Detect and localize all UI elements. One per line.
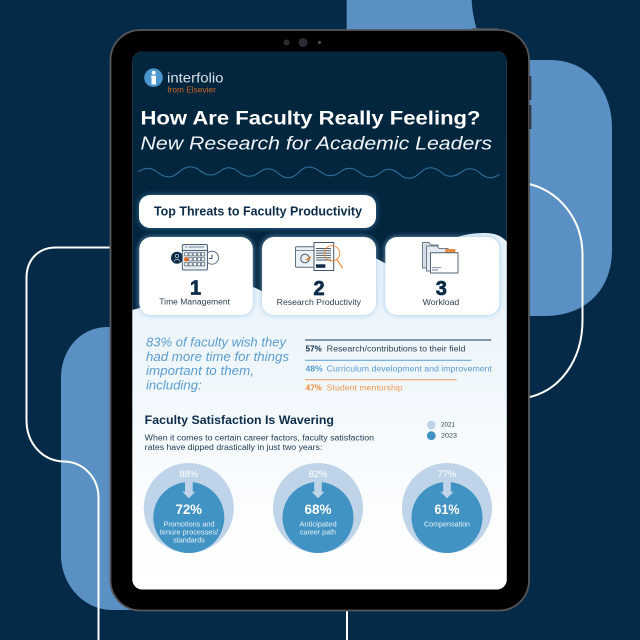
card: research productivity — [262, 237, 376, 315]
dark header wave — [132, 51, 507, 310]
chart: career path: 68% — [304, 502, 332, 517]
list: faculty priorities: 47% — [306, 384, 322, 393]
callout: 83 percent of faculty: had more time for things — [146, 350, 289, 364]
icon: calendar and clock — [171, 244, 218, 270]
chart: compensation: 77% — [438, 469, 456, 479]
logo — [144, 68, 224, 94]
tablet frame — [110, 28, 531, 611]
list: faculty priorities: 57% — [306, 344, 322, 353]
chart: compensation: Compensation — [424, 522, 470, 529]
list: faculty priorities — [305, 340, 493, 393]
chart: promotions: 72% — [176, 502, 202, 517]
heading: faculty satisfaction: Faculty Satisfaction Is Wavering — [145, 413, 334, 427]
icon: interfolio i — [144, 68, 163, 87]
chart: promotions — [144, 463, 234, 553]
logo: from Elsevier — [167, 86, 216, 94]
heading pill: top threats — [139, 195, 376, 228]
legend: 2023 — [441, 433, 457, 440]
icon: folders — [422, 242, 458, 273]
card: workload: Workload — [423, 298, 459, 307]
background shape: left blue — [61, 327, 140, 610]
list: faculty priorities: Student mentorship — [327, 384, 403, 393]
line: bottom connector — [346, 605, 348, 640]
callout: 83 percent of faculty: 83% of faculty wish they — [146, 336, 287, 350]
card: time management: 1 — [190, 277, 201, 299]
chart: promotions: 88% — [179, 469, 198, 479]
list: faculty priorities: 48% — [306, 365, 323, 374]
title: How Are Faculty Really Feeling? — [140, 108, 480, 129]
chart: career path: 82% — [309, 469, 327, 479]
chart: career path: career path — [300, 529, 336, 536]
callout: 83 percent of faculty: including: — [146, 378, 202, 392]
icon: documents and magnifier — [296, 242, 343, 270]
tablet screen — [132, 51, 507, 590]
card: time management: Time Management — [159, 298, 231, 307]
heading pill: top threats: Top Threats to Faculty Productivity — [154, 204, 362, 218]
chart: compensation: 61% — [434, 502, 460, 517]
chart: career path — [273, 463, 363, 553]
callout: 83 percent of faculty: important to them, — [146, 364, 254, 378]
chart: compensation — [402, 463, 492, 553]
chart: promotions: tenure processes/ — [160, 529, 218, 536]
chart: promotions: standards — [173, 537, 205, 544]
background shape: right blue — [520, 60, 612, 316]
card: time management — [139, 237, 253, 315]
line: left connector — [26, 248, 115, 640]
legend: 2021 — [441, 422, 455, 429]
card: workload — [385, 237, 499, 315]
heading pill glow — [139, 195, 376, 228]
chart: promotions: Promotions and — [164, 522, 215, 529]
card: research productivity: 2 — [313, 278, 325, 300]
body text: rates have dipped drastically in just two years: — [145, 443, 322, 452]
card: workload: 3 — [436, 278, 447, 300]
background shape: top blue — [347, 0, 478, 32]
callout: 83 percent of faculty — [146, 336, 289, 392]
line: right connector — [525, 183, 582, 398]
body text — [145, 434, 374, 452]
card: research productivity: Research Productivity — [277, 298, 361, 307]
logo: interfolio — [167, 70, 224, 86]
legend — [427, 421, 457, 440]
body text: When it comes to certain career factors, faculty satisfaction — [145, 434, 374, 443]
list: faculty priorities: Research/contributions to their field — [327, 344, 465, 353]
list: faculty priorities: Curriculum development and improvement — [327, 365, 493, 374]
chart: career path: Anticipated — [299, 522, 337, 529]
wave divider — [138, 167, 500, 178]
subtitle: New Research for Academic Leaders — [140, 132, 492, 153]
